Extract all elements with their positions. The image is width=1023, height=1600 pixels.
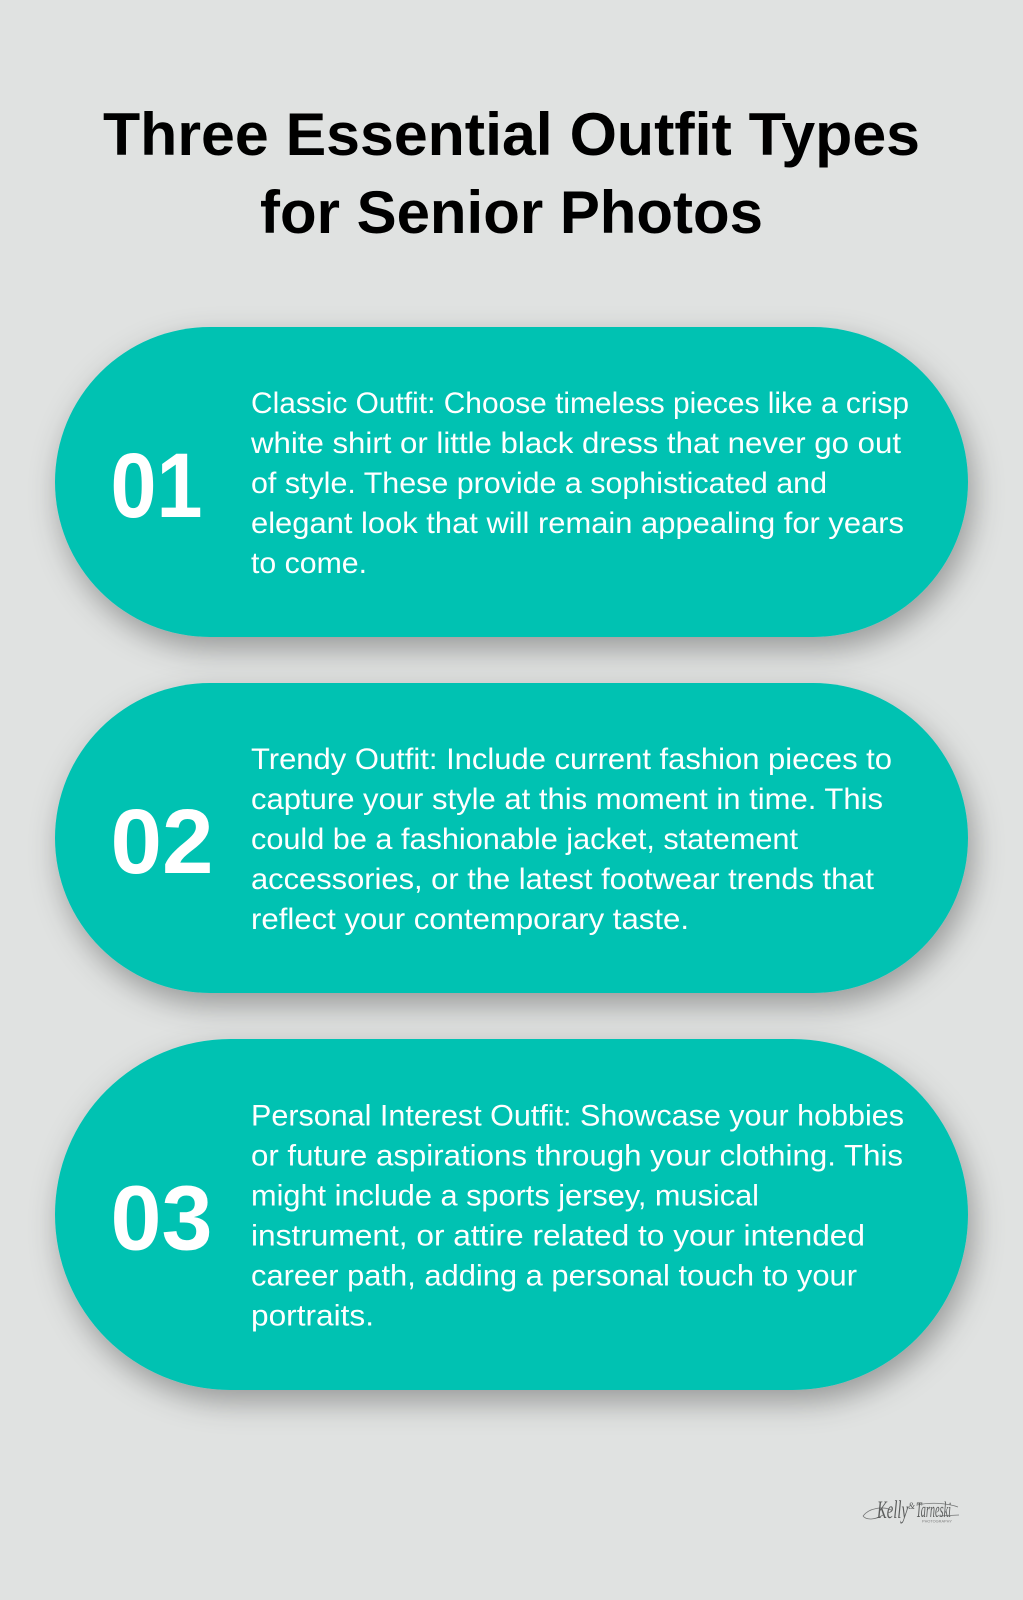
logo: signature: Kelly	[876, 1497, 909, 1524]
text block: personal interest outfit: career path, adding a personal touch to your	[251, 1260, 857, 1292]
text block: classic outfit: white shirt or little black dress that never go out	[250, 427, 902, 460]
text block: classic outfit: elegant look that will remain appealing for years	[251, 507, 904, 540]
logo: signature	[863, 1497, 959, 1524]
title	[103, 101, 920, 246]
text block: trendy outfit	[251, 743, 892, 936]
text block: personal interest outfit: portraits.	[251, 1300, 374, 1332]
text block: classic outfit: of style. These provide a sophisticated and	[251, 467, 827, 500]
text block: classic outfit: to come.	[251, 547, 367, 580]
text block: trendy outfit: accessories, or the latest footwear trends that	[251, 863, 875, 896]
text block: trendy outfit: could be a fashionable jacket, statement	[251, 823, 799, 856]
panel: trendy outfit	[55, 683, 968, 993]
pill background 02	[55, 683, 968, 993]
panel: personal interest outfit	[55, 1039, 968, 1390]
text block: personal interest outfit: Personal Interest Outfit: Showcase your hobbies	[251, 1100, 904, 1132]
logo: signature: Tarneski	[916, 1497, 951, 1522]
pill background 01	[55, 327, 968, 637]
number 02: 02	[110, 791, 214, 893]
text block: personal interest outfit: or future aspirations through your clothing. This	[251, 1140, 903, 1172]
text block: personal interest outfit: might include a sports jersey, musical	[251, 1180, 759, 1212]
panel: classic outfit	[55, 327, 968, 637]
title: for Senior Photos	[260, 179, 763, 246]
logo: signature: PHOTOGRAPHY	[922, 1520, 953, 1524]
title: Three Essential Outfit Types	[103, 101, 920, 168]
text block: trendy outfit: Trendy Outfit: Include current fashion pieces to	[251, 743, 892, 776]
text block: trendy outfit: capture your style at this moment in time. This	[251, 783, 883, 816]
number 03: 03	[110, 1168, 212, 1270]
number 01: 01	[110, 435, 202, 537]
logo: signature: &	[908, 1501, 915, 1511]
text block: trendy outfit: reflect your contemporary taste.	[251, 903, 689, 936]
text block: classic outfit	[250, 387, 909, 580]
text block: personal interest outfit: instrument, or attire related to your intended	[251, 1220, 865, 1252]
pill background 03	[55, 1039, 968, 1390]
text block: classic outfit: Classic Outfit: Choose timeless pieces like a crisp	[251, 387, 909, 420]
text block: personal interest outfit	[251, 1100, 904, 1332]
